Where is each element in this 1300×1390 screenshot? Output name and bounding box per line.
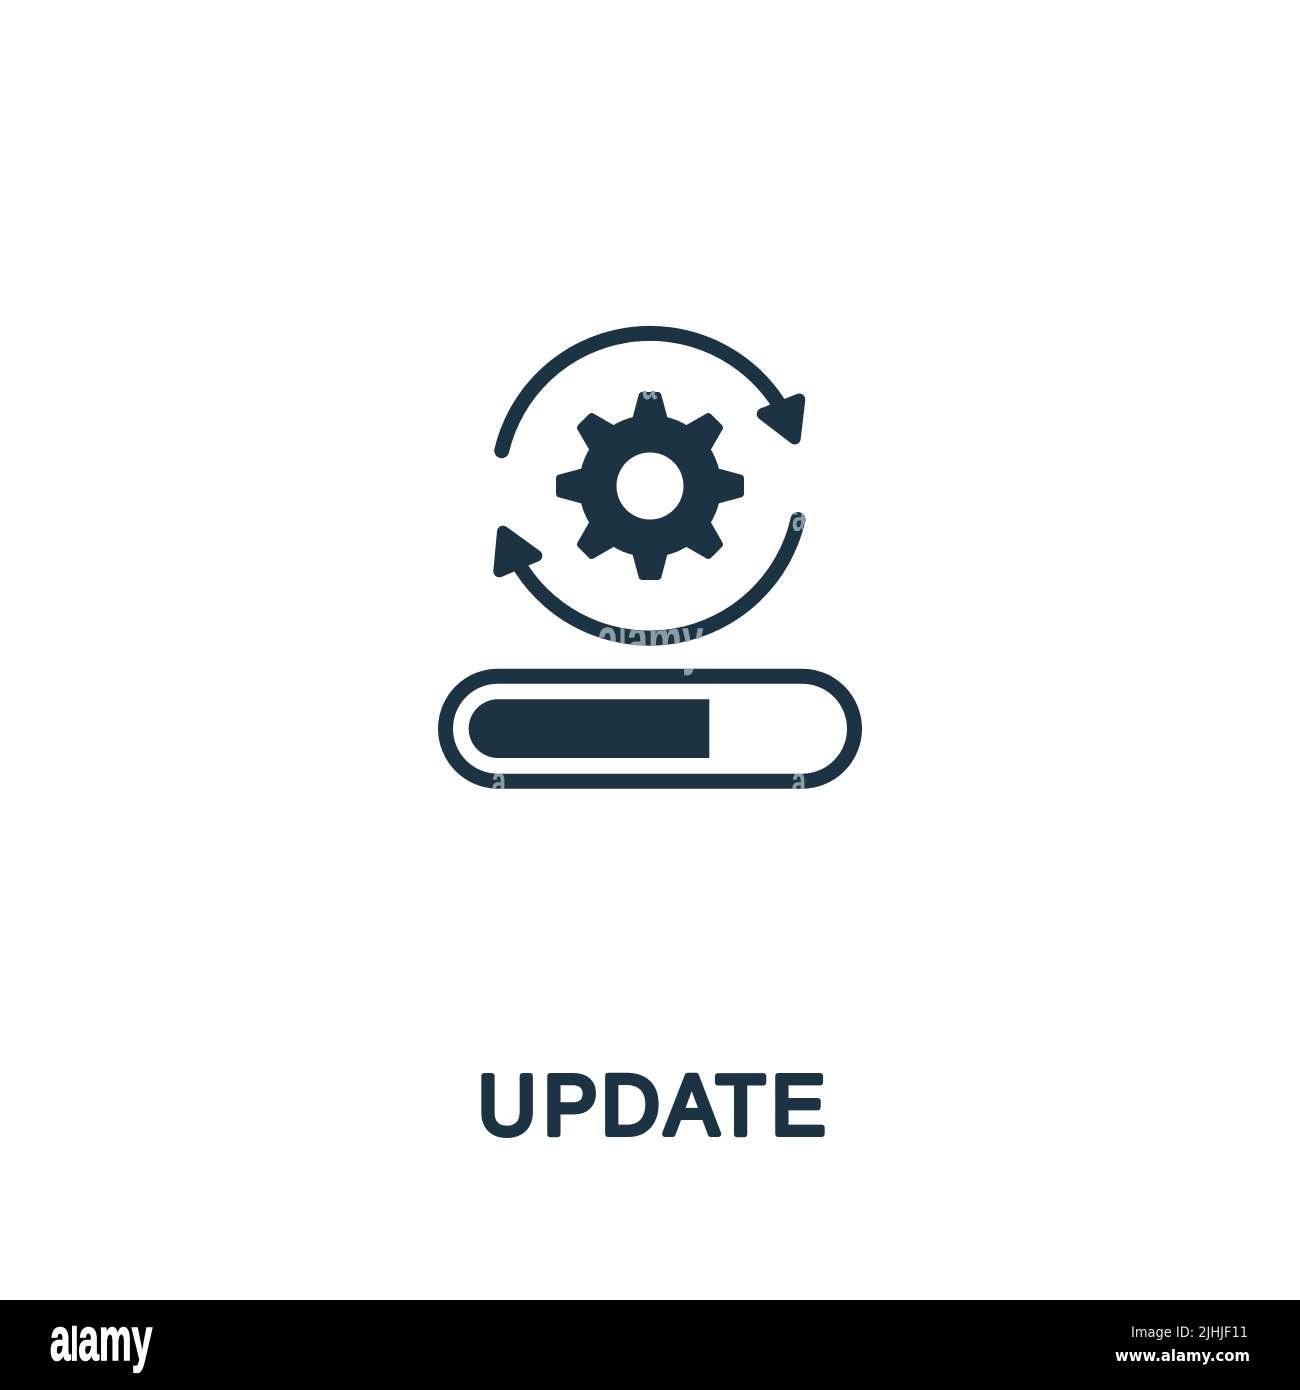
title: UPDATE	[478, 1059, 825, 1152]
website: www.alamy.com	[1115, 1346, 1250, 1365]
footer band	[0, 1300, 1300, 1390]
watermark fragments over icon: a	[792, 491, 807, 541]
watermark fragments over icon: a	[642, 359, 657, 409]
image id: Image ID: 2JHJF11	[1131, 1325, 1248, 1341]
arrow: lower circular arrow	[499, 520, 798, 638]
watermark fragments over icon: alamy	[597, 605, 704, 677]
progress bar	[446, 676, 854, 781]
watermark fragments over icon: a	[492, 756, 507, 806]
icon: gear	[560, 396, 740, 576]
watermark fragments over icon: a	[792, 756, 807, 806]
icon: update gear with arrows and progress bar	[446, 333, 854, 806]
watermark fragments over icon	[492, 391, 805, 789]
watermark fragments over icon: alamy	[597, 605, 704, 677]
footer logo: alamy	[50, 1306, 152, 1373]
arrow: upper circular arrow	[502, 333, 799, 451]
infographic canvas	[0, 326, 1300, 1390]
